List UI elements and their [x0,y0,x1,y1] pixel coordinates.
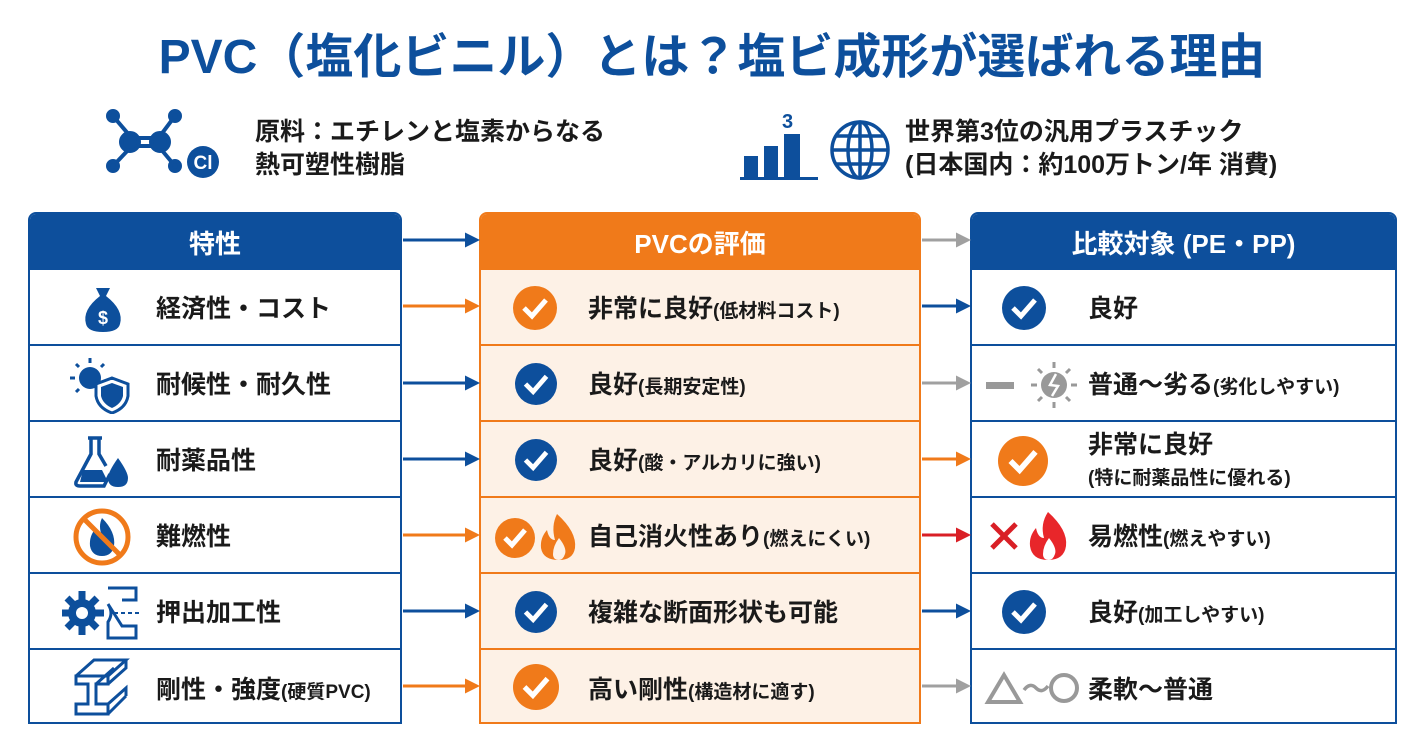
row: flammable [972,498,1395,574]
row: good acid: 良好(酸・アルカリに強い) [588,447,821,475]
icon: bar chart and globe [740,111,890,180]
text: world rank [905,118,1277,179]
row: flexible [984,671,1213,704]
row: degrades: 普通〜劣る(劣化しやすい) [1088,371,1339,399]
panel: comparison PE/PP [970,212,1397,724]
info: world rank [740,111,1277,180]
text: raw material: 熱可塑性樹脂 [255,151,405,179]
row: flammable: 易燃性(燃えやすい) [1088,523,1271,551]
icon: molecule [106,109,219,178]
text: world rank: 世界第3位の汎用プラスチック [905,118,1243,146]
row: complex profiles [481,574,919,650]
row: weather [30,346,400,422]
row: self-extinguishing: 自己消火性あり(燃えにくい) [588,523,870,551]
row: chemical: 耐薬品性 [156,447,256,475]
row: good processing [972,574,1395,650]
title: PVC（塩化ビニル）とは？塩ビ成形が選ばれる理由 [159,31,1265,84]
row: very good chemical: (特に耐薬品性に優れる) [1088,468,1291,489]
row: high rigidity [513,664,815,710]
row: good [972,270,1395,346]
row: rigidity: 剛性・強度(硬質PVC) [156,676,371,704]
row: cost: $ [98,308,108,328]
row: extrusion: 押出加工性 [156,599,281,627]
header: PVC evaluation: PVCの評価 [634,228,766,258]
icon: molecule: Cl [194,153,212,174]
header: characteristics [30,214,400,270]
row: weather: 耐候性・耐久性 [156,371,331,399]
info: raw material [106,109,605,179]
row: very good chemical: 非常に良好 [1088,431,1213,459]
icon: bar chart and globe: 3 [782,111,793,133]
row: good long-term [481,346,919,422]
row: high rigidity: 高い剛性(構造材に適す) [588,676,815,704]
row: good: 良好 [1088,295,1138,323]
header: comparison: 比較対象 (PE・PP) [1072,228,1295,258]
row: very good [481,270,919,346]
row: complex profiles: 複雑な断面形状も可能 [588,599,838,627]
panel: PVC evaluation [479,212,921,724]
text: raw material: 原料：エチレンと塩素からなる [255,118,605,146]
row: very good chemical [972,422,1395,498]
header: comparison [972,214,1395,270]
row: cost [30,270,400,346]
row: flame: 難燃性 [156,523,231,551]
row: flexible: 柔軟〜普通 [1088,676,1213,704]
row: good long-term: 良好(長期安定性) [588,371,746,399]
row: good acid [481,422,919,498]
row: very good: 非常に良好(低材料コスト) [588,295,840,323]
row: chemical [30,422,400,498]
text: raw material [255,118,605,179]
row: good processing: 良好(加工しやすい) [1088,599,1264,627]
row: degrades [972,346,1395,422]
panel: characteristics [28,212,402,724]
row: cost: 経済性・コスト [156,295,331,323]
text: world rank: (日本国内：約100万トン/年 消費) [905,151,1277,179]
row: self-extinguishing [481,498,919,574]
row: rigidity [74,658,371,716]
row: flame [30,498,400,574]
row: extrusion [30,574,400,650]
header: characteristics: 特性 [189,228,241,258]
header: PVC evaluation [481,214,919,270]
